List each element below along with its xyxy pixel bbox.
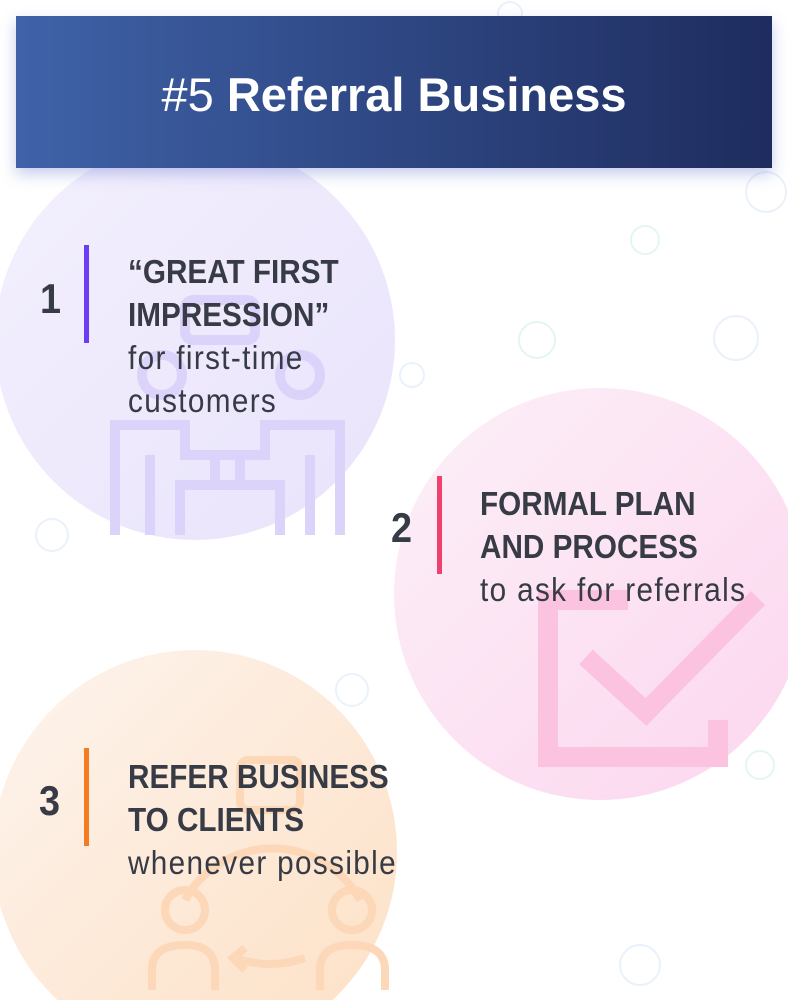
icon: meeting people — [115, 300, 340, 535]
number 3: 3 — [39, 777, 60, 824]
text 3: whenever possible — [128, 844, 397, 881]
icon: checkbox — [548, 598, 758, 757]
circle 1 — [0, 140, 395, 540]
text 1: customers — [128, 382, 277, 419]
accent bar 3 — [84, 748, 89, 846]
text 3: TO CLIENTS — [128, 801, 304, 838]
text 2: FORMAL PLAN — [480, 485, 696, 522]
accent bar 2 — [437, 476, 442, 574]
text 1: IMPRESSION” — [128, 296, 329, 333]
text 3: REFER BUSINESS — [128, 758, 389, 795]
text 1: “GREAT FIRST — [128, 253, 339, 290]
number 1: 1 — [40, 275, 61, 322]
item 1 — [40, 245, 339, 419]
circle 2 — [394, 388, 788, 800]
icon: people exchange — [152, 760, 385, 990]
item 2 — [391, 476, 746, 608]
text 2: AND PROCESS — [480, 528, 698, 565]
text 2: to ask for referrals — [480, 571, 746, 608]
header banner — [16, 16, 772, 168]
accent bar 1 — [84, 245, 89, 343]
circle 3 — [0, 650, 397, 1000]
number 2: 2 — [391, 504, 412, 551]
item 3 — [39, 748, 397, 881]
text 2 — [480, 485, 746, 608]
title: #5 Referral Business — [161, 68, 627, 121]
text 3 — [128, 758, 397, 881]
text 1 — [128, 253, 339, 419]
text 1: for first-time — [128, 339, 304, 376]
